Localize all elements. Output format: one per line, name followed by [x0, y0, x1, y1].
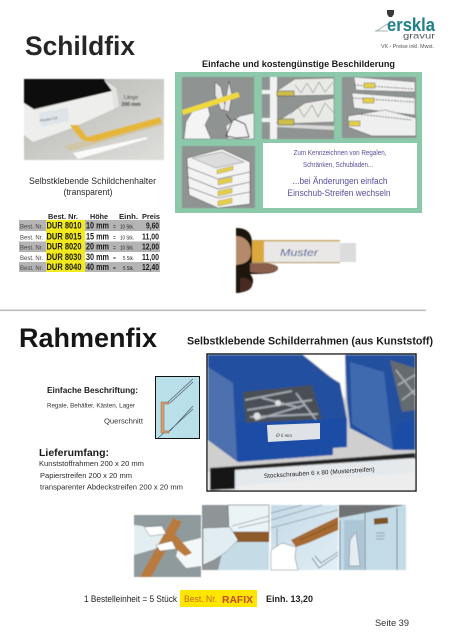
callout: white text box: Schränken, Schubladen...	[303, 160, 373, 169]
caption: Selbstklebende Schildchenhalter: (transparent)	[64, 187, 113, 197]
badge: Best. Nr. RAFIX	[180, 590, 257, 607]
step 4: labelled lockers	[339, 505, 406, 570]
row: DUR 8010: =	[113, 224, 116, 230]
step 3: sliding in the strip	[271, 505, 338, 570]
row: DUR 8010: DUR 8010	[46, 220, 82, 230]
logo: erskla gravur: erskla	[387, 15, 436, 35]
illustration: cutting strip with scissors	[182, 77, 254, 139]
icon: cross-section frame	[156, 376, 200, 438]
row: DUR 8040: Best. Nr.	[20, 265, 43, 272]
text: Lieferumfang: Kunststoffrahmen 200 x 20 mm	[39, 459, 144, 468]
row: DUR 8020	[20, 242, 159, 252]
heading: Einfache und kostengünstige Beschilderung: Einfache und kostengünstige Beschilderung	[202, 59, 395, 69]
callout: white text box: ...bei Änderungen einfach	[292, 176, 388, 186]
row: DUR 8030: 30 mm	[86, 252, 109, 262]
callout: white text box	[263, 143, 417, 208]
row: DUR 8010	[20, 220, 159, 230]
order line: Einh. 13,20	[266, 594, 313, 604]
label: Länge 200 mm: 200 mm	[121, 102, 141, 108]
row: DUR 8015: 15 mm	[86, 232, 109, 242]
row: DUR 8040: 5 Stk.	[123, 266, 134, 272]
caption: Selbstklebende Schildchenhalter: Selbstklebende Schildchenhalter	[29, 176, 156, 186]
text: Einfache Beschriftung: Regale, Behälter, Kästen, Lager	[47, 402, 136, 410]
label: Länge 200 mm: Länge	[124, 95, 138, 101]
photo: hand holding Muster strip: Muster	[280, 247, 319, 259]
text: Lieferumfang: transparenter Abdeckstreifen 200 x 20 mm	[40, 482, 183, 492]
row: DUR 8015: 11,00	[142, 232, 159, 242]
row: DUR 8015	[20, 232, 159, 242]
illustration: drawers with labels	[342, 77, 416, 138]
row: DUR 8020: 10 Stk.	[120, 246, 134, 252]
row: DUR 8040: 12,40	[142, 263, 159, 272]
photo: blue bins with screws: Ø 6 mm	[275, 434, 292, 439]
row: DUR 8030: 11,00	[142, 253, 159, 262]
title: Schildfix: Schildfix	[25, 31, 135, 61]
divider	[0, 310, 426, 311]
row: DUR 8010: 10 Stk.	[120, 224, 134, 230]
heading: Selbstklebende Schilderrahmen: Selbstklebende Schilderrahmen (aus Kunststoff)	[187, 336, 433, 348]
row: DUR 8020: DUR 8020	[46, 242, 82, 252]
row: DUR 8010: 10 mm	[86, 220, 109, 230]
row: DUR 8040: =	[113, 266, 116, 272]
table header	[48, 212, 160, 221]
label: Länge 200 mm	[121, 95, 141, 108]
label strip text: Stockschrauben 6 x 80 (Musterstreifen)	[264, 466, 375, 480]
row: DUR 8020: 20 mm	[86, 242, 109, 252]
caption: Selbstklebende Schildchenhalter	[29, 176, 156, 197]
logo: erskla gravur: gravur	[403, 30, 435, 40]
order line	[84, 590, 313, 607]
text: Lieferumfang: Papierstreifen 200 x 20 mm	[40, 471, 132, 480]
row: DUR 8015: DUR 8015	[46, 232, 82, 242]
page number: Seite 39	[375, 618, 409, 628]
row: DUR 8030: Best. Nr.	[20, 255, 43, 262]
text: Einfache Beschriftung: Einfache Beschriftung:	[47, 385, 138, 395]
badge: Best. Nr. RAFIX: RAFIX	[222, 595, 253, 606]
badge: Best. Nr. RAFIX: Best. Nr.	[184, 594, 217, 604]
illustration strip: mounting steps	[134, 505, 406, 577]
text: Lieferumfang	[39, 447, 183, 492]
logo: erskla gravur	[375, 10, 436, 50]
row: DUR 8010: Best. Nr.	[20, 224, 43, 230]
row: DUR 8040	[20, 262, 159, 272]
table header: Einh.	[119, 212, 138, 221]
title: Rahmenfix: Rahmenfix	[19, 323, 157, 353]
illustration: stacked trays	[182, 146, 255, 208]
table header: Höhe	[90, 212, 108, 221]
photo: Schildfix strip and box	[24, 79, 164, 160]
illustration: shelves with labels	[262, 77, 334, 139]
row: DUR 8030: 5 Stk.	[123, 256, 134, 262]
table header: Best. Nr.	[48, 212, 78, 221]
row: DUR 8030	[20, 252, 159, 262]
order line: 1 Bestelleinheit = 5 Stück	[84, 594, 178, 604]
text: Lieferumfang: Lieferumfang:	[39, 447, 109, 459]
step 1: cutting the frame	[134, 515, 201, 577]
row: DUR 8010: 9,60	[146, 222, 159, 230]
text: Einfache Beschriftung	[47, 385, 144, 426]
row: DUR 8030: DUR 8030	[46, 252, 82, 262]
step 2: applying to a drawer	[202, 505, 269, 570]
table header: Preis	[142, 212, 160, 221]
row: DUR 8030: =	[113, 256, 116, 262]
text: Einfache Beschriftung: Querschnitt	[104, 416, 144, 426]
row: DUR 8040: 40 mm	[86, 262, 109, 272]
row: DUR 8020: Best. Nr.	[20, 244, 43, 252]
price table	[19, 212, 160, 272]
callout: white text box: Zum Kennzeichnen von Regalen,	[294, 148, 386, 157]
callout: white text box: Einschub-Streifen wechseln	[288, 188, 390, 198]
photo: hand holding Muster strip	[236, 228, 356, 293]
photo: Schildfix strip and box: Pfosten 5,8	[39, 116, 58, 123]
logo: erskla gravur: VK - Preise inkl. Mwst.	[381, 44, 434, 50]
row: DUR 8015: =	[113, 236, 116, 242]
panel: green usage illustrations	[175, 72, 422, 213]
row: DUR 8020: =	[113, 246, 116, 252]
row: DUR 8020: 12,00	[142, 242, 159, 252]
row: DUR 8015: 10 Stk.	[120, 236, 134, 242]
row: DUR 8040: DUR 8040	[46, 262, 82, 272]
photo: blue bins with screws	[207, 354, 416, 491]
row: DUR 8015: Best. Nr.	[20, 234, 43, 242]
